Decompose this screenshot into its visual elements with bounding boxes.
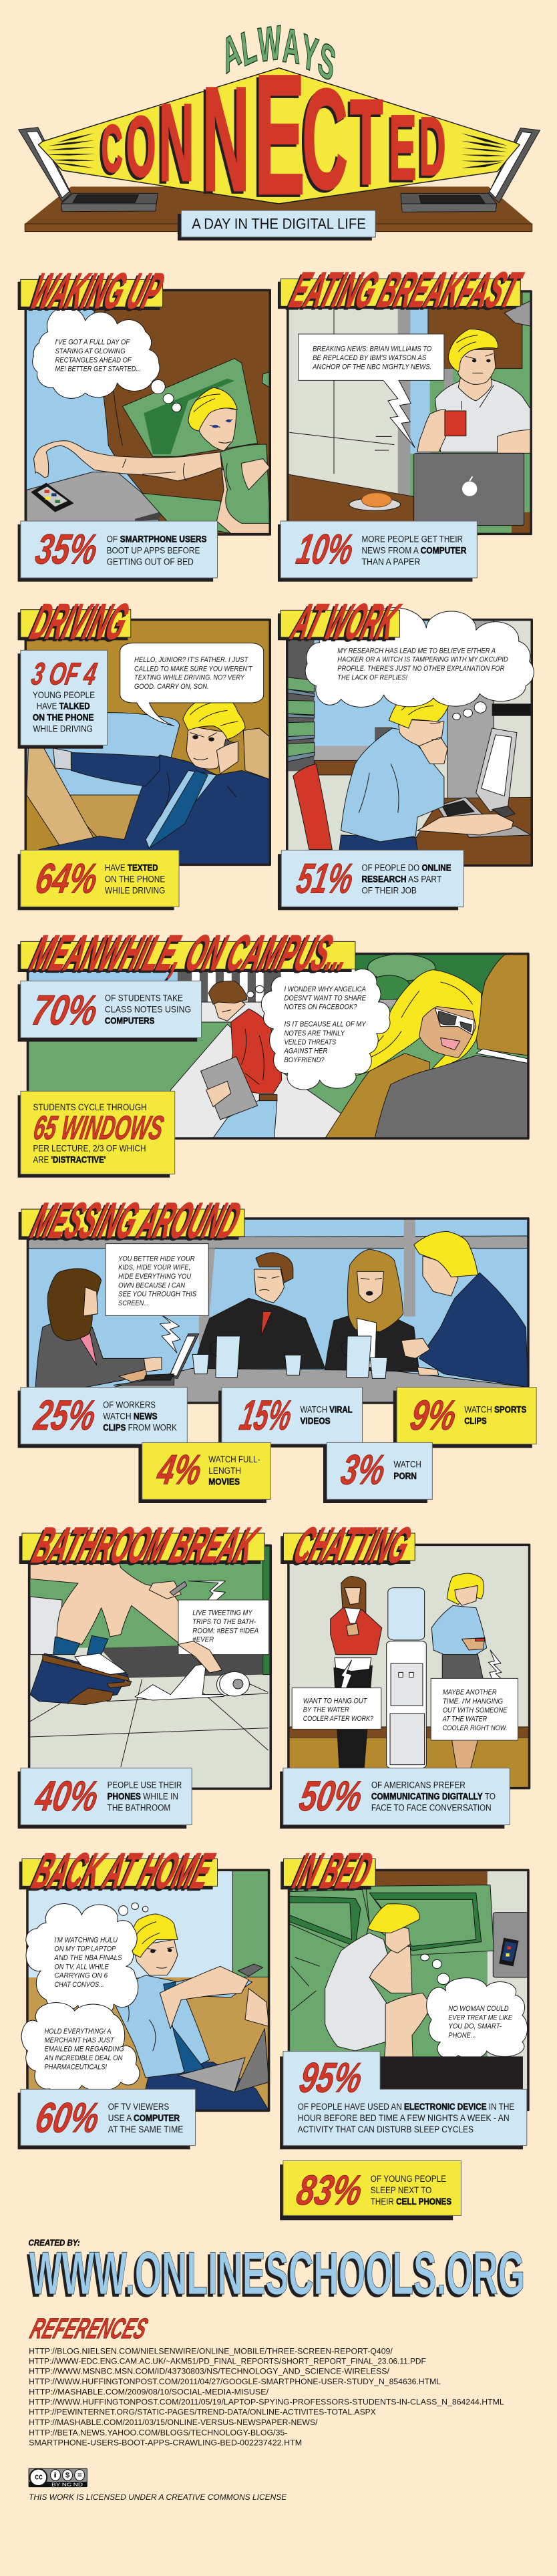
seated figure bbox=[30, 1564, 215, 1705]
panel: eating breakfast bbox=[278, 261, 531, 582]
water cooler illustration bbox=[289, 1545, 530, 1788]
reference list: HTTP://BETA.NEWS.YAHOO.COM/BLOGS/TECHNOLOGY-BLOG/35- bbox=[29, 2429, 287, 2437]
heading: waking up bbox=[18, 263, 170, 319]
stat: 70%: CLASS NOTES USING bbox=[105, 1004, 191, 1015]
stat: 9%: CLIPS bbox=[464, 1416, 487, 1426]
subtitle box bbox=[178, 210, 375, 240]
thought bubble bbox=[33, 307, 181, 412]
stat: 15%: WATCH VIRAL bbox=[300, 1404, 353, 1414]
speech box: LIVE TWEETING MY bbox=[192, 1609, 252, 1617]
heading: chatting bbox=[281, 1517, 417, 1573]
title block bbox=[19, 16, 540, 240]
thought bubble: YOU DO, SMART- bbox=[448, 2022, 502, 2031]
reference list bbox=[29, 2348, 504, 2447]
sleeping man bbox=[325, 1904, 431, 2089]
speech box: #EVER bbox=[192, 1635, 214, 1644]
stat: 3 of 4: WHILE DRIVING bbox=[33, 723, 93, 734]
waking up illustration bbox=[25, 289, 270, 534]
speech bubble: GOOD. CARRY ON, SON. bbox=[134, 682, 209, 691]
thought bubble: IS IT BECAUSE ALL OF MY bbox=[285, 1020, 366, 1029]
stat: 4%: 4% bbox=[153, 1446, 206, 1493]
speech bubble bbox=[120, 643, 264, 726]
heading: connected: T bbox=[350, 74, 383, 210]
stat: 10%: NEWS FROM A COMPUTER bbox=[361, 545, 467, 556]
heading: connected: C bbox=[302, 59, 348, 219]
thought bubble: THE LACK OF REPLIES! bbox=[337, 673, 408, 681]
creative commons badge: BY NC ND bbox=[51, 2482, 83, 2488]
stat: 60%: AT THE SAME TIME bbox=[108, 2124, 183, 2134]
stat: 70%: OF STUDENTS TAKE bbox=[105, 993, 183, 1003]
stat: 25%: OF WORKERS bbox=[103, 1400, 156, 1410]
thought bubble bottom: EMAILED ME REGARDING bbox=[44, 2045, 124, 2054]
heading: back at home bbox=[19, 1842, 220, 1899]
thought bubble: NOTES ARE THINLY bbox=[285, 1029, 345, 1037]
speech box bbox=[299, 334, 444, 448]
heading: in bed bbox=[281, 1842, 379, 1899]
thought bubble bbox=[247, 959, 390, 1090]
grey suited man bbox=[375, 1049, 528, 1138]
stat: 60%: OF TV VIEWERS bbox=[108, 2101, 169, 2112]
heading: connected: E bbox=[389, 96, 417, 199]
panel: in bed bbox=[280, 1842, 528, 2220]
footer bbox=[27, 2238, 525, 2502]
speech box: OWN BECAUSE I CAN bbox=[118, 1281, 185, 1289]
speech box bbox=[178, 1581, 269, 1655]
stat: 64%: HAVE TEXTED bbox=[105, 862, 158, 872]
speech box right: TIME. I'M HANGING bbox=[443, 1697, 503, 1706]
office illustration bbox=[287, 620, 532, 866]
stat: 70% bbox=[18, 981, 202, 1041]
burst rays bbox=[46, 133, 508, 168]
stat: 4% bbox=[138, 1442, 270, 1503]
red mug bbox=[445, 411, 466, 436]
red chair bbox=[293, 764, 332, 850]
campus illustration bbox=[27, 954, 528, 1138]
thought bubble: VEILED THREATS bbox=[285, 1038, 336, 1046]
stat: 10% bbox=[278, 521, 477, 582]
stat: 83%: 83% bbox=[293, 2166, 366, 2213]
meeting illustration bbox=[27, 1219, 528, 1403]
stat: 15%: VIDEOS bbox=[300, 1416, 331, 1426]
man at computer bbox=[339, 692, 514, 850]
stat: 10%: THAN A PAPER bbox=[361, 556, 420, 567]
speech box: BREAKING NEWS: BRIAN WILLIAMS TO bbox=[313, 345, 431, 353]
thought bubble bottom: PHARMACEUTICALS! bbox=[44, 2063, 108, 2071]
stat: 65 windows bbox=[18, 1091, 175, 1178]
speech box left: WANT TO HANG OUT bbox=[303, 1697, 368, 1705]
right laptop bbox=[401, 128, 540, 212]
speech box right: AT THE WATER bbox=[442, 1715, 487, 1724]
stat: 64%: 64% bbox=[32, 855, 102, 902]
thought bubble: DOESN'T WANT TO SHARE bbox=[285, 994, 366, 1002]
stat: 95%: OF PEOPLE HAVE USED AN ELECTRONIC DEVICE IN THE bbox=[298, 2101, 514, 2112]
thought bubble: I WONDER WHY ANGELICA bbox=[285, 985, 366, 993]
blonde man in navy bbox=[401, 1231, 528, 1388]
creative commons badge: i bbox=[53, 2472, 57, 2480]
stat: 51%: RESEARCH AS PART bbox=[361, 874, 441, 884]
heading: connected: N bbox=[202, 56, 250, 222]
panel: waking up bbox=[18, 263, 270, 582]
stat: 65 windows: ARE 'DISTRACTIVE' bbox=[33, 1154, 106, 1164]
thought bubble: RECTANGLES AHEAD OF bbox=[55, 356, 132, 364]
student with laptop bbox=[201, 981, 282, 1138]
stat: 50%: 50% bbox=[296, 1772, 366, 1819]
stat: 3 of 4: ON THE PHONE bbox=[33, 712, 94, 723]
panel: meanwhile on campus bbox=[18, 925, 528, 1178]
creative commons badge bbox=[29, 2468, 87, 2488]
bookshelf bbox=[288, 677, 315, 762]
stat: 65 windows: PER LECTURE, 2/3 OF WHICH bbox=[33, 1143, 146, 1153]
stat: 4%: LENGTH bbox=[208, 1465, 241, 1476]
small laptop bbox=[114, 1334, 199, 1385]
heading: connected: O bbox=[126, 99, 156, 195]
heading: connected bbox=[102, 39, 446, 231]
license text: THIS WORK IS LICENSED UNDER A CREATIVE COMMONS LICENSE bbox=[29, 2493, 287, 2502]
stat: 50%: OF AMERICANS PREFER bbox=[371, 1780, 466, 1790]
stat: 3%: PORN bbox=[393, 1470, 417, 1481]
stat: 25%: CLIPS FROM WORK bbox=[103, 1422, 177, 1432]
thought bubble: BOYFRIEND? bbox=[285, 1056, 325, 1064]
stat: 15%: 15% bbox=[236, 1392, 296, 1438]
stat: 50% bbox=[280, 1768, 510, 1828]
stat: 64%: WHILE DRIVING bbox=[105, 885, 165, 895]
stat: 40%: 40% bbox=[31, 1772, 102, 1819]
driving illustration bbox=[25, 620, 270, 864]
stat: 10%: 10% bbox=[293, 526, 357, 573]
woman in red bbox=[331, 1576, 382, 1768]
speech box bbox=[106, 1244, 208, 1353]
stat: 3 of 4: YOUNG PEOPLE bbox=[33, 689, 95, 700]
creative commons badge: cc bbox=[35, 2472, 43, 2482]
panel: driving: 3 OF 4 bbox=[29, 657, 100, 691]
stat: 51%: OF PEOPLE DO ONLINE bbox=[361, 862, 451, 872]
stat: 83%: THEIR CELL PHONES bbox=[371, 2196, 451, 2207]
thought bubble: NOTES ON FACEBOOK? bbox=[285, 1003, 357, 1011]
speech box: TRIPS TO THE BATH- bbox=[192, 1617, 256, 1626]
stat: 83% bbox=[280, 2160, 461, 2220]
panel: waking up: WAKING UP bbox=[25, 263, 170, 319]
stat: 70%: 70% bbox=[29, 987, 102, 1033]
man in bed bbox=[34, 387, 270, 533]
laptop with logo bbox=[414, 453, 524, 526]
creative commons badge: = bbox=[77, 2472, 81, 2480]
speech box left: BY THE WATER bbox=[303, 1706, 349, 1714]
thought bubble top: I'M WATCHING HULU bbox=[54, 1936, 118, 1944]
stat: 4%: WATCH FULL- bbox=[208, 1454, 260, 1464]
section: back at home and in bed bbox=[18, 1842, 528, 2220]
heading: driving bbox=[18, 593, 136, 649]
speech box: ROOM: #BEST #IDEA bbox=[192, 1627, 258, 1635]
created by label: CREATED BY: bbox=[29, 2238, 80, 2248]
breakfast illustration bbox=[288, 291, 531, 534]
woman in blue shirt bbox=[431, 1573, 487, 1768]
reference list: HTTP://MASHABLE.COM/2009/08/10/SOCIAL-MEDIA-MISUSE/ bbox=[29, 2388, 269, 2396]
man on phone bbox=[39, 695, 270, 864]
speech box: YOU BETTER HIDE YOUR bbox=[118, 1255, 195, 1263]
stat: 3 of 4: HAVE TALKED bbox=[37, 701, 90, 711]
speech bubble: CALLED TO MAKE SURE YOU WEREN'T bbox=[134, 665, 253, 673]
thought bubble bbox=[421, 1954, 528, 2059]
stat: 9%: WATCH SPORTS bbox=[464, 1404, 526, 1414]
thought bubble bottom: AN INCREDIBLE DEAL ON bbox=[44, 2054, 123, 2062]
heading: always: ALWAYS bbox=[218, 16, 339, 93]
heading: meanwhile on campus bbox=[18, 925, 358, 981]
stat: 25%: 25% bbox=[30, 1392, 100, 1438]
thought bubble: STARING AT GLOWING bbox=[55, 347, 126, 355]
speech bubble: TEXTING WHILE DRIVING. NO? VERY bbox=[134, 673, 245, 682]
panel: at work bbox=[278, 593, 534, 910]
stat: 64%: ON THE PHONE bbox=[105, 874, 165, 884]
speech box left: COOLER AFTER WORK? bbox=[303, 1714, 373, 1723]
heading: connected: N bbox=[159, 82, 194, 204]
man with remote bbox=[114, 1914, 269, 2110]
thought bubble: AGAINST HER bbox=[284, 1047, 327, 1056]
creative commons badge: $ bbox=[65, 2472, 69, 2480]
section: waking up and breakfast bbox=[18, 261, 531, 582]
thought bubble: I'VE GOT A FULL DAY OF bbox=[55, 338, 130, 347]
left laptop bbox=[19, 128, 158, 212]
stat: 51% bbox=[278, 850, 463, 910]
stat: 35% bbox=[18, 521, 218, 582]
thought bubble bottom: HOLD EVERYTHING! A bbox=[44, 2027, 111, 2036]
thought bubble top: ON TV, ALL WHILE bbox=[54, 1963, 109, 1971]
blonde woman bbox=[325, 970, 482, 1138]
reference list: SMARTPHONE-USERS-BOOT-APPS-CRAWLING-BED-002237422.HTM bbox=[29, 2439, 302, 2447]
stat: 64% bbox=[18, 850, 179, 910]
stat: 3%: 3% bbox=[337, 1446, 389, 1493]
stat: 35%: BOOT UP APPS BEFORE bbox=[107, 545, 200, 556]
speech box right: MAYBE ANOTHER bbox=[443, 1688, 497, 1697]
heading: connected: D bbox=[419, 101, 446, 193]
stat: 9% bbox=[393, 1388, 536, 1448]
desk and monitor bbox=[415, 728, 532, 866]
stat: 70%: COMPUTERS bbox=[105, 1015, 154, 1025]
stat: 60%: USE A COMPUTER bbox=[108, 2112, 180, 2123]
heading: connected: C bbox=[102, 112, 123, 186]
panel: driving: DRIVING bbox=[25, 593, 136, 649]
water cooler bbox=[387, 1588, 426, 1768]
stat: 35%: OF SMARTPHONE USERS bbox=[107, 534, 207, 544]
stat: 25%: WATCH NEWS bbox=[103, 1411, 158, 1421]
thought bubble bottom bbox=[21, 2003, 140, 2093]
heading: messing around bbox=[19, 1192, 248, 1249]
man with red tie bbox=[194, 1253, 325, 1368]
stat: 10%: MORE PEOPLE GET THEIR bbox=[361, 534, 463, 544]
stat: 60%: 60% bbox=[32, 2094, 104, 2141]
stat: 40%: PEOPLE USE THEIR bbox=[108, 1780, 182, 1790]
couch illustration bbox=[27, 1870, 269, 2110]
thought bubble bottom: MERCHANT HAS JUST bbox=[44, 2036, 115, 2044]
brown desk bbox=[25, 186, 532, 232]
speech box right bbox=[431, 1650, 518, 1740]
stat: 65 windows: STUDENTS CYCLE THROUGH bbox=[33, 1102, 147, 1112]
speech box: KIDS, HIDE YOUR WIFE, bbox=[118, 1263, 190, 1272]
stat: 83%: SLEEP NEXT TO bbox=[371, 2185, 431, 2195]
heading: at work bbox=[278, 593, 407, 649]
arm reaching for roll bbox=[178, 1641, 222, 1673]
woman with gold hair bbox=[325, 1249, 419, 1372]
panel: messing around bbox=[18, 1192, 536, 1503]
panel: bathroom break bbox=[18, 1517, 270, 1828]
panel: driving bbox=[18, 593, 270, 910]
thought bubble top: ON MY TOP LAPTOP bbox=[54, 1945, 116, 1953]
speech box: SEE YOU THROUGH THIS bbox=[118, 1290, 196, 1299]
stat: 40%: PHONES WHILE IN bbox=[108, 1791, 178, 1801]
gold hair right bbox=[476, 954, 528, 1056]
stat: 9%: 9% bbox=[407, 1392, 460, 1438]
stat: 51%: 51% bbox=[293, 855, 357, 902]
subtitle box: A DAY IN THE DIGITAL LIFE bbox=[192, 216, 366, 232]
speech box: HIDE EVERYTHING YOU bbox=[118, 1272, 191, 1281]
phone on nightstand bbox=[31, 483, 74, 512]
thought bubble bbox=[305, 608, 534, 720]
pillows bbox=[289, 1885, 494, 1955]
panel: back at home bbox=[18, 1842, 269, 2149]
stat: 3 of 4 bbox=[18, 650, 108, 749]
stat: 35%: 35% bbox=[32, 526, 102, 573]
thought bubble top bbox=[26, 1903, 148, 2018]
section: driving and at work bbox=[18, 593, 534, 910]
stat: 15% bbox=[218, 1388, 363, 1448]
stat: 51%: OF THEIR JOB bbox=[361, 885, 417, 895]
footer: REFERENCES bbox=[27, 2313, 152, 2345]
section: bathroom and chatting bbox=[18, 1517, 530, 1828]
heading: connected: E bbox=[254, 39, 305, 231]
thought bubble top: AND THE NBA FINALS bbox=[54, 1953, 122, 1962]
speech box: ANCHOR OF THE NBC NIGHTLY NEWS. bbox=[312, 363, 431, 371]
speech bubble: HELLO, JUNIOR? IT'S FATHER. I JUST bbox=[134, 655, 248, 664]
stat: 40% bbox=[18, 1768, 192, 1828]
toilet paper roll bbox=[135, 1663, 249, 1700]
stat: 95% bbox=[280, 2052, 527, 2149]
stat: 40%: THE BATHROOM bbox=[108, 1802, 170, 1812]
woman at laptop bbox=[35, 1269, 162, 1388]
stat: 25% bbox=[18, 1388, 187, 1448]
speech box: BE REPLACED BY IBM'S WATSON AS bbox=[313, 353, 426, 362]
bed illustration bbox=[289, 1870, 528, 2110]
speech box: SCREEN... bbox=[118, 1299, 149, 1307]
stat: 83%: OF YOUNG PEOPLE bbox=[371, 2173, 446, 2184]
panel: chatting bbox=[280, 1517, 530, 1828]
stat: 4%: MOVIES bbox=[208, 1476, 240, 1487]
stat: 3%: WATCH bbox=[393, 1459, 421, 1470]
speech box left bbox=[292, 1660, 381, 1729]
reference list: HTTP://MASHABLE.COM/2011/03/15/ONLINE-VERSUS-NEWSPAPER-NEWS/ bbox=[29, 2418, 318, 2427]
yellow diamond banner bbox=[38, 68, 520, 204]
pitchers and glasses bbox=[192, 1336, 387, 1378]
man with mug bbox=[417, 329, 531, 453]
stat: 3% bbox=[323, 1442, 432, 1503]
lap laptop bbox=[178, 2029, 269, 2092]
plate and croissant bbox=[349, 493, 400, 510]
bathroom illustration bbox=[29, 1545, 270, 1788]
stat: 95%: 95% bbox=[296, 2054, 366, 2101]
thought bubble: ME! BETTER GET STARTED... bbox=[55, 365, 141, 373]
panel: meanwhile on campus: 65 WINDOWS bbox=[31, 1109, 166, 1146]
thought bubble top: CHAT CONVOS... bbox=[54, 1980, 104, 1989]
thought bubble top: CARRYING ON 6 bbox=[54, 1971, 108, 1980]
thought bubble: PHONE... bbox=[448, 2031, 476, 2040]
stat: 35%: GETTING OUT OF BED bbox=[107, 556, 194, 567]
stat: 60% bbox=[18, 2089, 196, 2149]
phone on nightstand bbox=[499, 1938, 519, 1966]
heading: bathroom break bbox=[19, 1517, 266, 1573]
